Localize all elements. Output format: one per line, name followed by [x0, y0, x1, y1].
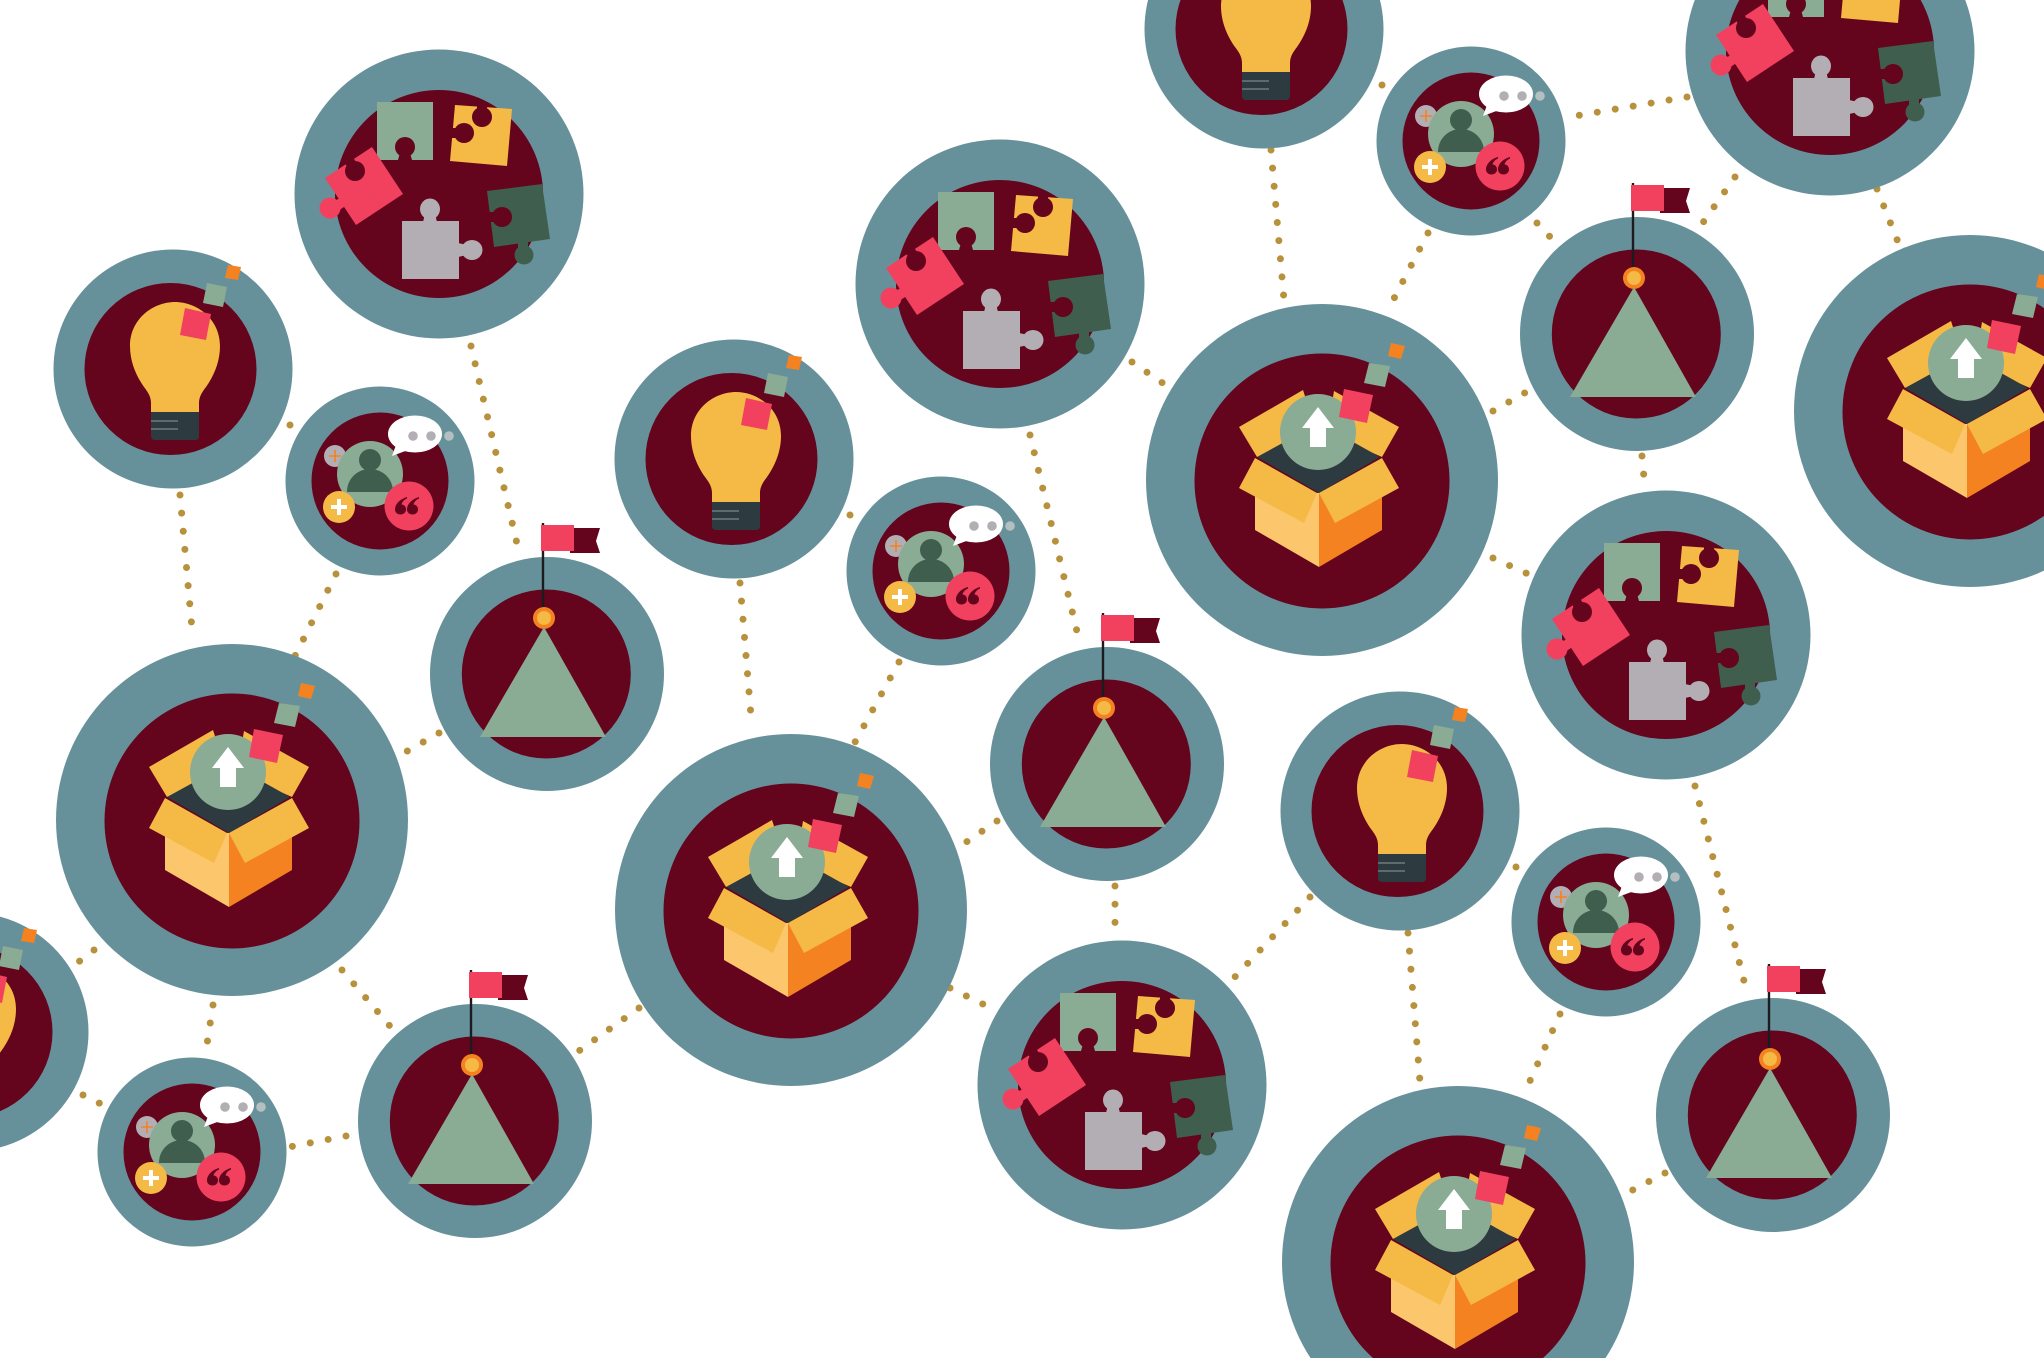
node: puzzle pieces, bottom centre: [978, 940, 1266, 1230]
dotted connector lines: [72, 84, 1898, 1193]
node: puzzle pieces, right: [1522, 490, 1810, 780]
node: person with speech bubble, left: [286, 386, 474, 576]
node: open box, centre: [615, 734, 967, 1086]
node: flag on peak, top right: [1520, 183, 1754, 451]
node: flag on peak, centre: [990, 613, 1224, 881]
node: person with speech bubble, centre: [846, 476, 1036, 666]
node: light bulb, top: [1144, 0, 1384, 148]
node: puzzle pieces, top right: [1686, 0, 1974, 196]
node: open box, upper centre: [1146, 304, 1498, 656]
node: light bulb, lower right: [1280, 692, 1520, 930]
node: light bulb, centre: [614, 340, 854, 578]
node: open box, right edge: [1794, 235, 2044, 587]
node: open box, left: [56, 644, 408, 996]
node: puzzle pieces, upper centre: [856, 140, 1144, 428]
node: flag on peak, bottom left: [358, 970, 592, 1238]
node: person with speech bubble, top right: [1376, 46, 1566, 236]
node: person with speech bubble, lower right: [1512, 828, 1700, 1016]
node: open box, bottom: [1282, 1086, 1634, 1358]
node: puzzle pieces, top left: [294, 50, 584, 338]
node: flag on peak, bottom right: [1656, 964, 1890, 1232]
node: person with speech bubble, bottom left: [98, 1058, 286, 1246]
node: light bulb, left edge: [0, 912, 88, 1152]
node: flag on peak, left: [430, 523, 664, 791]
node: light bulb, left: [54, 250, 292, 488]
